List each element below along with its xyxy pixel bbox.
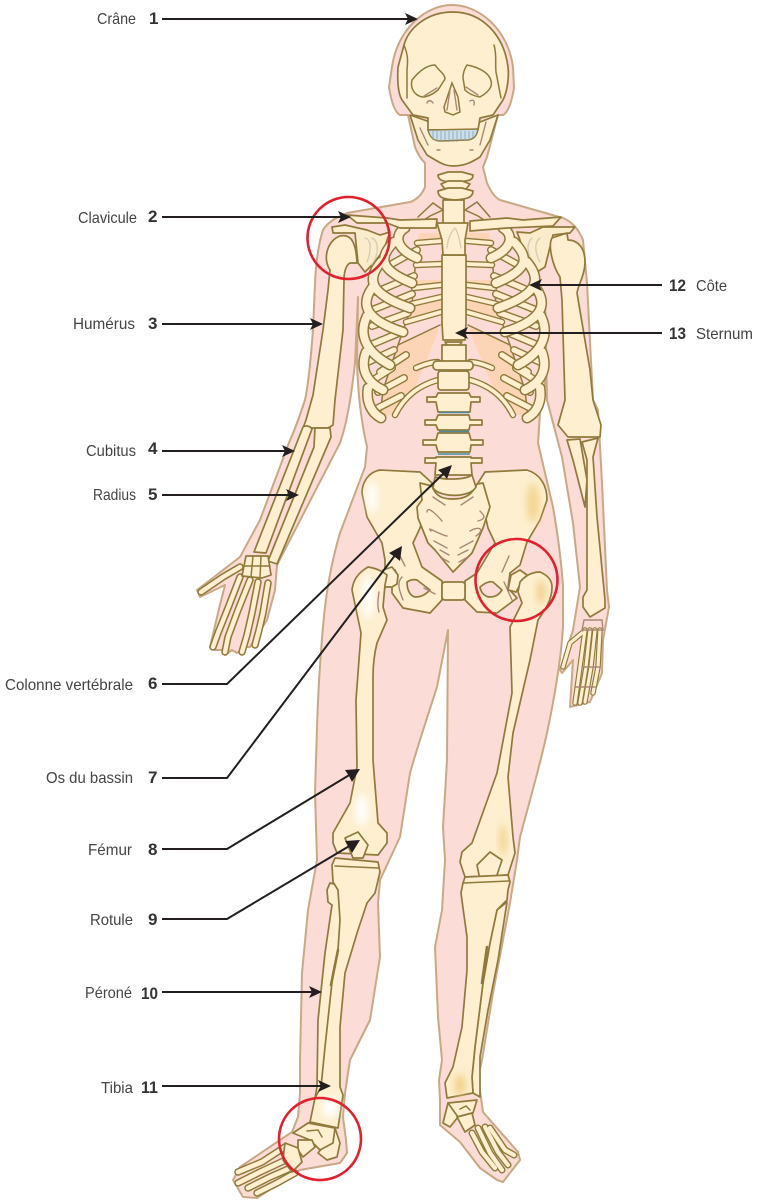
label 7: Os du bassin: 7 bbox=[148, 768, 157, 787]
label 2: Clavicule: 2 bbox=[148, 207, 157, 226]
rib cartilage bbox=[380, 233, 528, 418]
scapulae bbox=[332, 225, 575, 272]
right humerus bbox=[550, 233, 601, 437]
label 1: Crâne: 1 bbox=[149, 9, 158, 28]
label 8: Fémur: Fémur bbox=[88, 842, 133, 859]
skeleton bbox=[201, 12, 605, 1193]
label 7: Os du bassin bbox=[46, 546, 402, 787]
left foot bbox=[238, 1123, 340, 1193]
ribs left bbox=[363, 228, 441, 418]
label 4: Cubitus: 4 bbox=[148, 439, 158, 458]
left fibula bbox=[315, 883, 341, 1098]
label 11: Tibia: Tibia bbox=[101, 1080, 133, 1097]
sternum bbox=[437, 223, 468, 353]
label 3: Humérus: 3 bbox=[148, 314, 157, 333]
right femur bbox=[460, 570, 552, 877]
label 6: Colonne vertébrale: 6 bbox=[148, 674, 157, 693]
body silhouette bbox=[197, 5, 609, 1198]
left forearm bbox=[254, 426, 331, 564]
left femur bbox=[333, 567, 398, 855]
left tibia bbox=[310, 858, 380, 1128]
label 1: Crâne: Crâne bbox=[97, 11, 136, 28]
label 5: Radius: 5 bbox=[148, 485, 157, 504]
cervical vertebrae bbox=[438, 172, 473, 224]
label 6: Colonne vertébrale: Colonne vertébrale bbox=[5, 677, 133, 694]
label 6: Colonne vertébrale bbox=[5, 465, 452, 694]
red circle: hip bbox=[476, 539, 558, 621]
label 8: Fémur bbox=[88, 769, 360, 859]
label 4: Cubitus: Cubitus bbox=[86, 443, 136, 460]
label 9: Rotule: 9 bbox=[148, 910, 157, 929]
label 12: Côte: 12 bbox=[669, 276, 686, 295]
label 10: Péroné: 10 bbox=[141, 984, 158, 1003]
label 12: Côte bbox=[529, 276, 727, 295]
label 9: Rotule bbox=[90, 840, 360, 929]
red circle: shoulder bbox=[308, 197, 390, 279]
label 13: Sternum: Sternum bbox=[696, 326, 753, 343]
label 3: Humérus bbox=[73, 314, 323, 333]
patellae bbox=[345, 832, 502, 882]
left hand bbox=[201, 556, 271, 652]
label 11: Tibia bbox=[101, 1078, 331, 1097]
spine bbox=[423, 345, 483, 475]
skull bbox=[398, 12, 508, 166]
label 10: Péroné: Péroné bbox=[85, 985, 132, 1002]
label 4: Cubitus bbox=[86, 439, 295, 460]
label 2: Clavicule bbox=[78, 207, 351, 227]
clavicles bbox=[347, 215, 561, 231]
ribs right bbox=[467, 228, 545, 418]
label 8: Fémur: 8 bbox=[148, 840, 157, 859]
label 5: Radius: Radius bbox=[93, 487, 136, 504]
right foot bbox=[443, 1100, 514, 1170]
label 9: Rotule: Rotule bbox=[90, 912, 133, 929]
label 3: Humérus: Humérus bbox=[73, 316, 135, 333]
label 10: Péroné bbox=[85, 984, 322, 1003]
label 2: Clavicule: Clavicule bbox=[78, 210, 137, 227]
label 13: Sternum bbox=[455, 324, 753, 343]
label 1: Crâne bbox=[97, 9, 418, 28]
right hand bbox=[563, 620, 603, 703]
label 13: Sternum: 13 bbox=[669, 324, 686, 343]
label 11: Tibia: 11 bbox=[141, 1078, 158, 1097]
right fibula bbox=[472, 902, 507, 1097]
label 5: Radius bbox=[93, 485, 299, 504]
right tibia bbox=[445, 875, 510, 1098]
pelvis bbox=[362, 470, 547, 613]
first ribs bbox=[418, 202, 490, 220]
right forearm bbox=[567, 438, 605, 617]
label 12: Côte: Côte bbox=[696, 278, 727, 295]
left humerus bbox=[303, 236, 357, 428]
red circle: ankle bbox=[279, 1098, 361, 1180]
label 7: Os du bassin: Os du bassin bbox=[46, 770, 133, 787]
